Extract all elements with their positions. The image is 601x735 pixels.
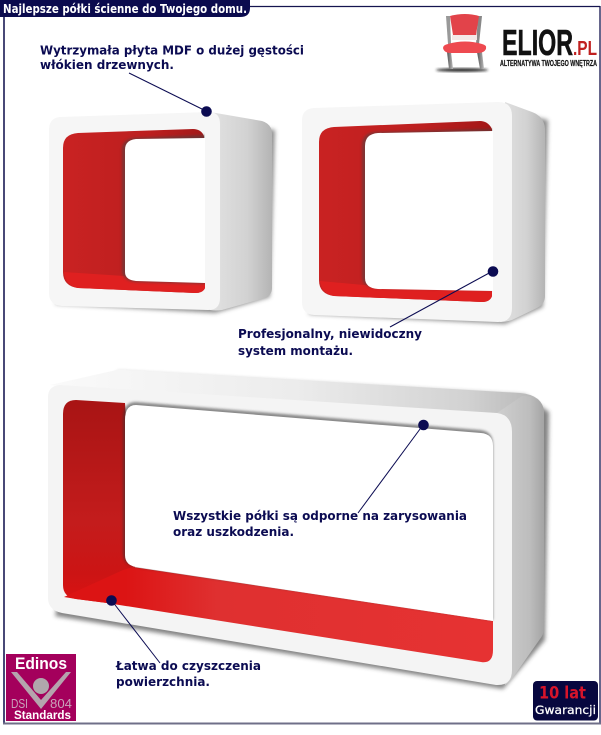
badge label: Gwarancji: [535, 703, 596, 717]
logo: Elior: [436, 14, 597, 72]
callout text: system montażu.: [238, 343, 353, 358]
callout line: [112, 601, 160, 663]
title tab: Najlepsze półki ścienne do Twojego domu.: [3, 1, 247, 16]
callout line: [358, 425, 423, 513]
badge DSI: DSI: [11, 696, 28, 711]
badge name: Edinos: [15, 655, 67, 673]
callout line: [129, 73, 206, 111]
badge 804: 804: [50, 696, 72, 711]
callout: scratch resistance: [173, 420, 467, 539]
callout line: [390, 272, 491, 327]
callout: mounting system: [238, 266, 498, 358]
callout: easy cleaning: [106, 595, 261, 689]
callout text: Łatwa do czyszczenia: [115, 658, 261, 673]
callout text: włókien drzewnych.: [40, 57, 174, 72]
callout text: Profesjonalny, niewidoczny: [238, 326, 422, 341]
callout dot: [106, 595, 117, 606]
callout text: Wszystkie półki są odporne na zarysowania: [173, 508, 467, 523]
callout text: Wytrzymała płyta MDF o dużej gęstości: [40, 42, 304, 58]
callout text: oraz uszkodzenia.: [173, 524, 294, 539]
badge: Edinos DSI 804 Standards: [6, 654, 76, 722]
callout dot: [488, 266, 498, 277]
icon: grey V with circle: [11, 672, 71, 709]
icon: red chair: [436, 14, 488, 72]
large shelf: [48, 370, 549, 689]
callout text: powierzchnia.: [116, 674, 210, 689]
small shelf left: [49, 112, 275, 313]
callout dot: [201, 106, 212, 117]
small shelf right: [302, 102, 548, 324]
badge years: 10 lat: [539, 684, 586, 704]
callout dot: [418, 420, 429, 430]
callout: MDF board: [40, 42, 304, 117]
badge: 10 lat gwarancji: [533, 681, 598, 720]
badge standards: Standards: [14, 708, 71, 722]
